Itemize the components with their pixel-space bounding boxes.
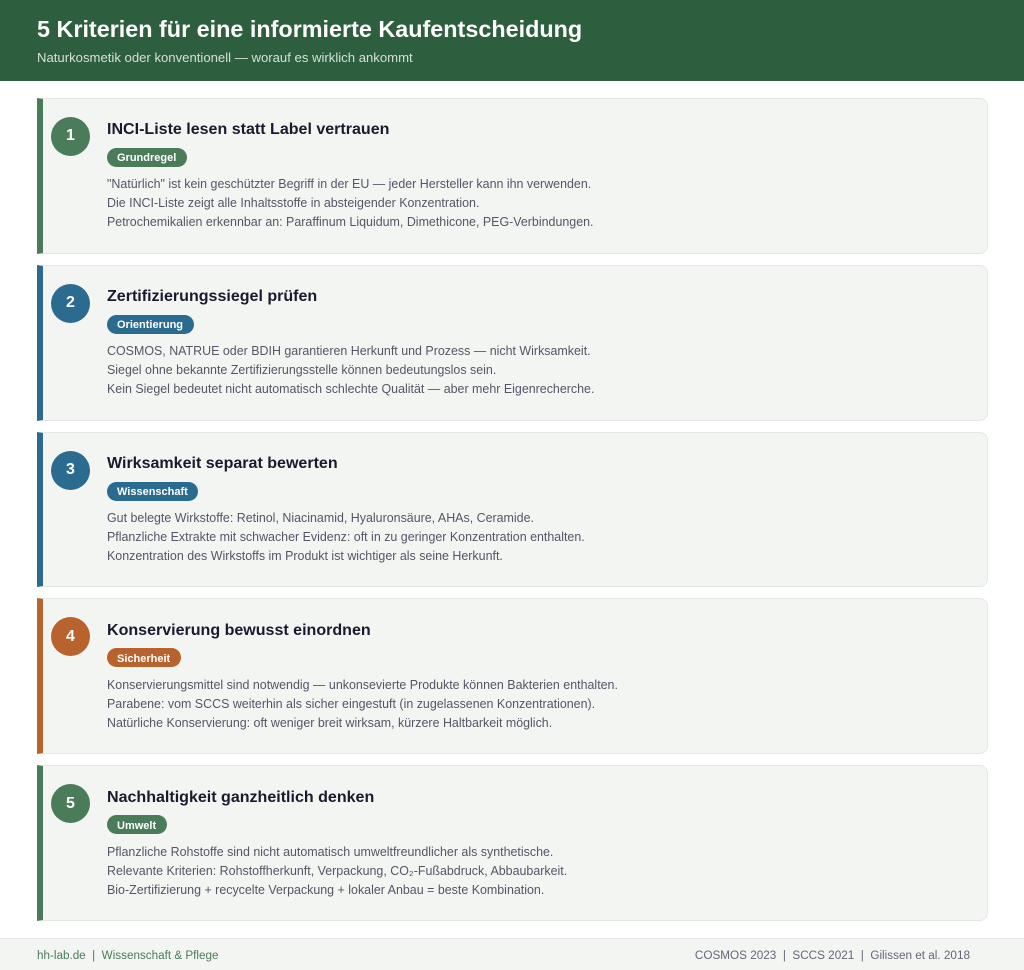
title: 5 Kriterien für eine informierte Kaufentscheidung bbox=[37, 16, 582, 42]
text block 2 bbox=[107, 344, 594, 396]
text block 2: Kein Siegel bedeutet nicht automatisch schlechte Qualität — aber mehr Eigenrecherche. bbox=[107, 382, 594, 396]
number badge 4 bbox=[51, 617, 90, 656]
panel: criterion 4 bbox=[37, 598, 988, 754]
text block 1: "Natürlich" ist kein geschützter Begriff in der EU — jeder Hersteller kann ihn verwenden. bbox=[107, 177, 591, 191]
text block 4: Parabene: vom SCCS weiterhin als sicher eingestuft (in zugelassenen Konzentrationen). bbox=[107, 697, 595, 711]
tag: Grundregel bbox=[107, 148, 187, 167]
text block 5 bbox=[107, 845, 567, 897]
panel: criterion 1 bbox=[37, 98, 988, 254]
text block 1: Petrochemikalien erkennbar an: Paraffinum Liquidum, Dimethicone, PEG-Verbindungen. bbox=[107, 215, 594, 229]
number badge 1 bbox=[51, 117, 90, 156]
text block 3: Gut belegte Wirkstoffe: Retinol, Niacinamid, Hyaluronsäure, AHAs, Ceramide. bbox=[107, 511, 534, 525]
footer brand: hh-lab.de | Wissenschaft & Pflege bbox=[37, 949, 218, 962]
header banner bbox=[0, 0, 1024, 81]
text block 1 bbox=[107, 177, 594, 229]
text block 3 bbox=[107, 511, 585, 563]
text block 4: Natürliche Konservierung: oft weniger breit wirksam, kürzere Haltbarkeit möglich. bbox=[107, 716, 552, 730]
tag: Umwelt bbox=[107, 815, 167, 834]
tag: Grundregel: Grundregel bbox=[117, 152, 176, 164]
footer sources: COSMOS 2023 | SCCS 2021 | Gilissen et al. 2018 bbox=[695, 949, 970, 962]
panel: criterion 2 bbox=[37, 265, 988, 421]
heading 1: INCI-Liste lesen statt Label vertrauen bbox=[107, 120, 389, 138]
text block 4 bbox=[107, 678, 618, 730]
tag: Wissenschaft bbox=[107, 482, 198, 501]
tag: Sicherheit: Sicherheit bbox=[117, 653, 170, 665]
tag: Wissenschaft: Wissenschaft bbox=[117, 486, 188, 498]
number badge 4: 4 bbox=[66, 628, 75, 645]
heading 2: Zertifizierungssiegel prüfen bbox=[107, 287, 317, 305]
heading 3: Wirksamkeit separat bewerten bbox=[107, 454, 338, 472]
number badge 2: 2 bbox=[66, 294, 75, 311]
heading 4: Konservierung bewusst einordnen bbox=[107, 621, 371, 639]
panel: criterion 5 bbox=[37, 765, 988, 921]
text block 1: Die INCI-Liste zeigt alle Inhaltsstoffe in absteigender Konzentration. bbox=[107, 196, 479, 210]
heading 5: Nachhaltigkeit ganzheitlich denken bbox=[107, 788, 374, 806]
number badge 1: 1 bbox=[66, 127, 75, 144]
text block 4: Konservierungsmittel sind notwendig — unkonsevierte Produkte können Bakterien enthalten. bbox=[107, 678, 618, 692]
text block 5: Relevante Kriterien: Rohstoffherkunft, Verpackung, CO₂-Fußabdruck, Abbaubarkeit. bbox=[107, 864, 567, 878]
text block 2: COSMOS, NATRUE oder BDIH garantieren Herkunft und Prozess — nicht Wirksamkeit. bbox=[107, 344, 591, 358]
tag: Umwelt: Umwelt bbox=[117, 820, 156, 832]
number badge 5 bbox=[51, 784, 90, 823]
text block 5: Pflanzliche Rohstoffe sind nicht automatisch umweltfreundlicher als synthetische. bbox=[107, 845, 553, 859]
text block 2: Siegel ohne bekannte Zertifizierungsstelle können bedeutungslos sein. bbox=[107, 363, 496, 377]
number badge 3: 3 bbox=[66, 461, 75, 478]
number badge 3 bbox=[51, 451, 90, 490]
panel: criterion 3 bbox=[37, 432, 988, 587]
number badge 5: 5 bbox=[66, 795, 75, 812]
number badge 2 bbox=[51, 284, 90, 323]
tag: Orientierung: Orientierung bbox=[117, 319, 183, 331]
subtitle: Naturkosmetik oder konventionell — worauf es wirklich ankommt bbox=[37, 50, 413, 65]
footer bbox=[0, 938, 1024, 970]
text block 3: Konzentration des Wirkstoffs im Produkt ist wichtiger als seine Herkunft. bbox=[107, 549, 503, 563]
tag: Orientierung bbox=[107, 315, 194, 334]
tag: Sicherheit bbox=[107, 648, 181, 667]
text block 3: Pflanzliche Extrakte mit schwacher Evidenz: oft in zu geringer Konzentration enthalten. bbox=[107, 530, 585, 544]
text block 5: Bio-Zertifizierung + recycelte Verpackung + lokaler Anbau = beste Kombination. bbox=[107, 883, 544, 897]
